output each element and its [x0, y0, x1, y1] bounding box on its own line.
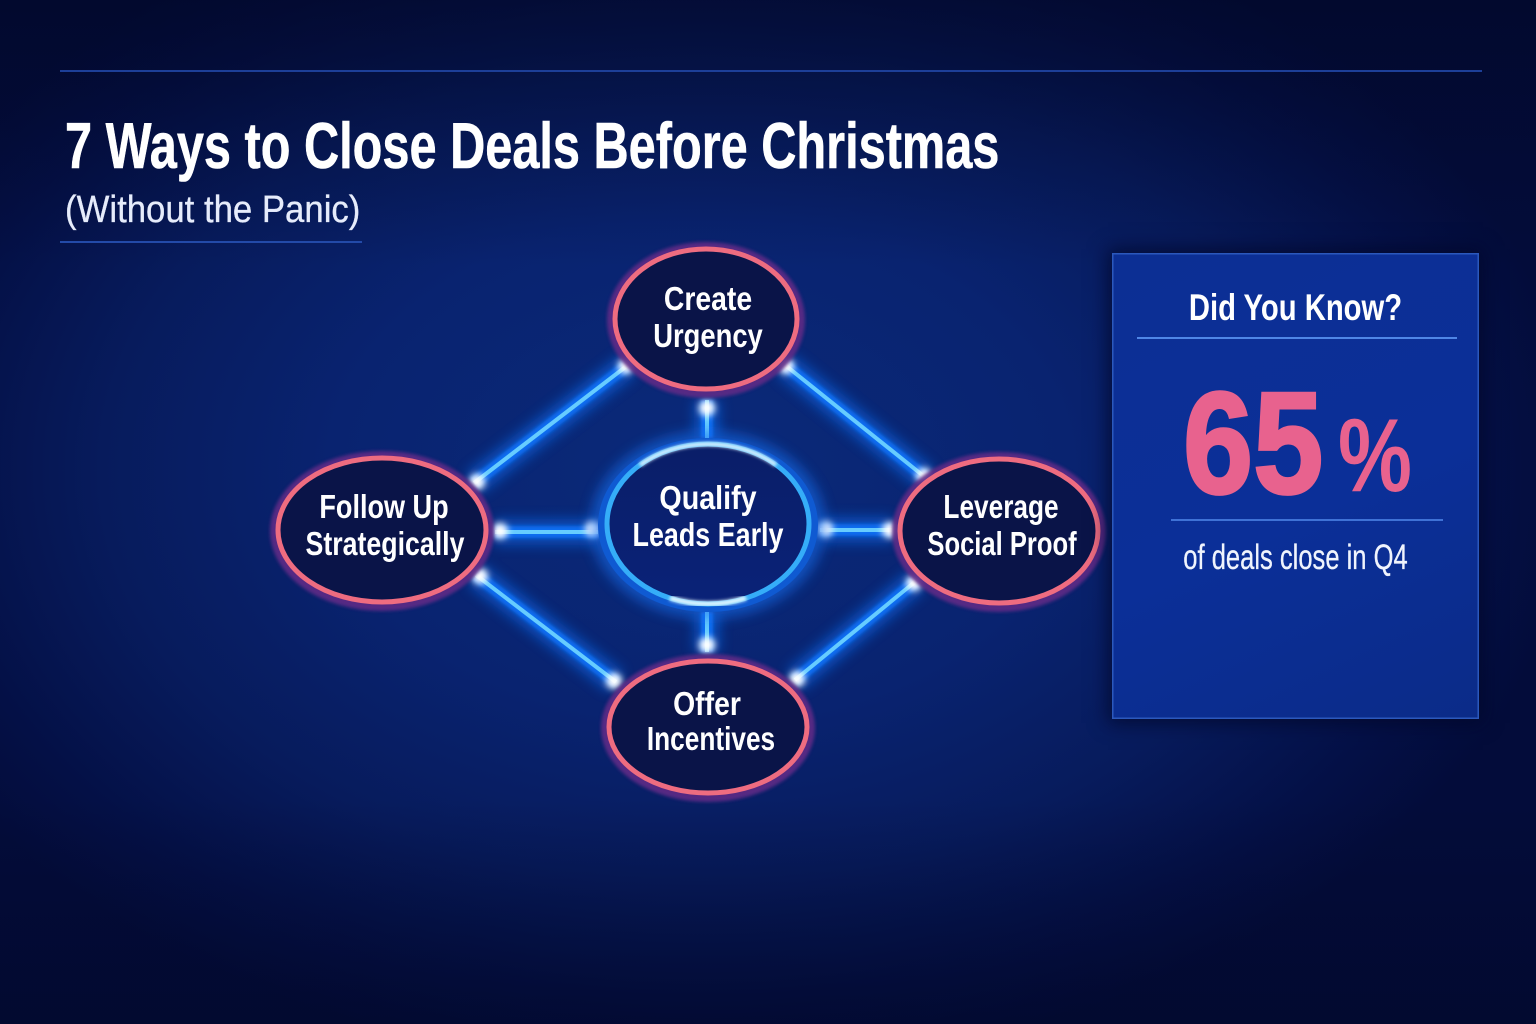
node: create urgency: Urgency [653, 319, 763, 355]
node: create urgency [607, 242, 805, 398]
statistic caption: of deals close in Q4 [1183, 538, 1408, 577]
node: leverage social proof: Leverage [943, 489, 1059, 526]
node: qualify leads early: Leads Early [633, 517, 784, 554]
node: offer incentives: Incentives [647, 721, 775, 758]
node: offer incentives: Offer [673, 685, 741, 723]
subtitle: (Without the Panic) [65, 189, 360, 231]
node: leverage social proof [892, 452, 1106, 612]
statistic [1183, 362, 1412, 524]
statistic: 65 [1183, 362, 1323, 524]
statistic: % [1338, 397, 1412, 513]
node: leverage social proof: Social Proof [927, 526, 1077, 563]
node: qualify leads early: Qualify [659, 479, 757, 516]
panel heading: Did You Know? [1189, 287, 1402, 328]
panel: did you know [1112, 253, 1479, 719]
node: follow up strategically: Strategically [306, 526, 465, 563]
node: follow up strategically [270, 451, 494, 611]
node: qualify leads early [590, 431, 826, 619]
node: create urgency: Create [664, 280, 752, 318]
node: offer incentives [601, 654, 815, 802]
connector lines [469, 358, 932, 689]
node: follow up strategically: Follow Up [319, 490, 449, 526]
title: 7 Ways to Close Deals Before Christmas [65, 109, 999, 182]
